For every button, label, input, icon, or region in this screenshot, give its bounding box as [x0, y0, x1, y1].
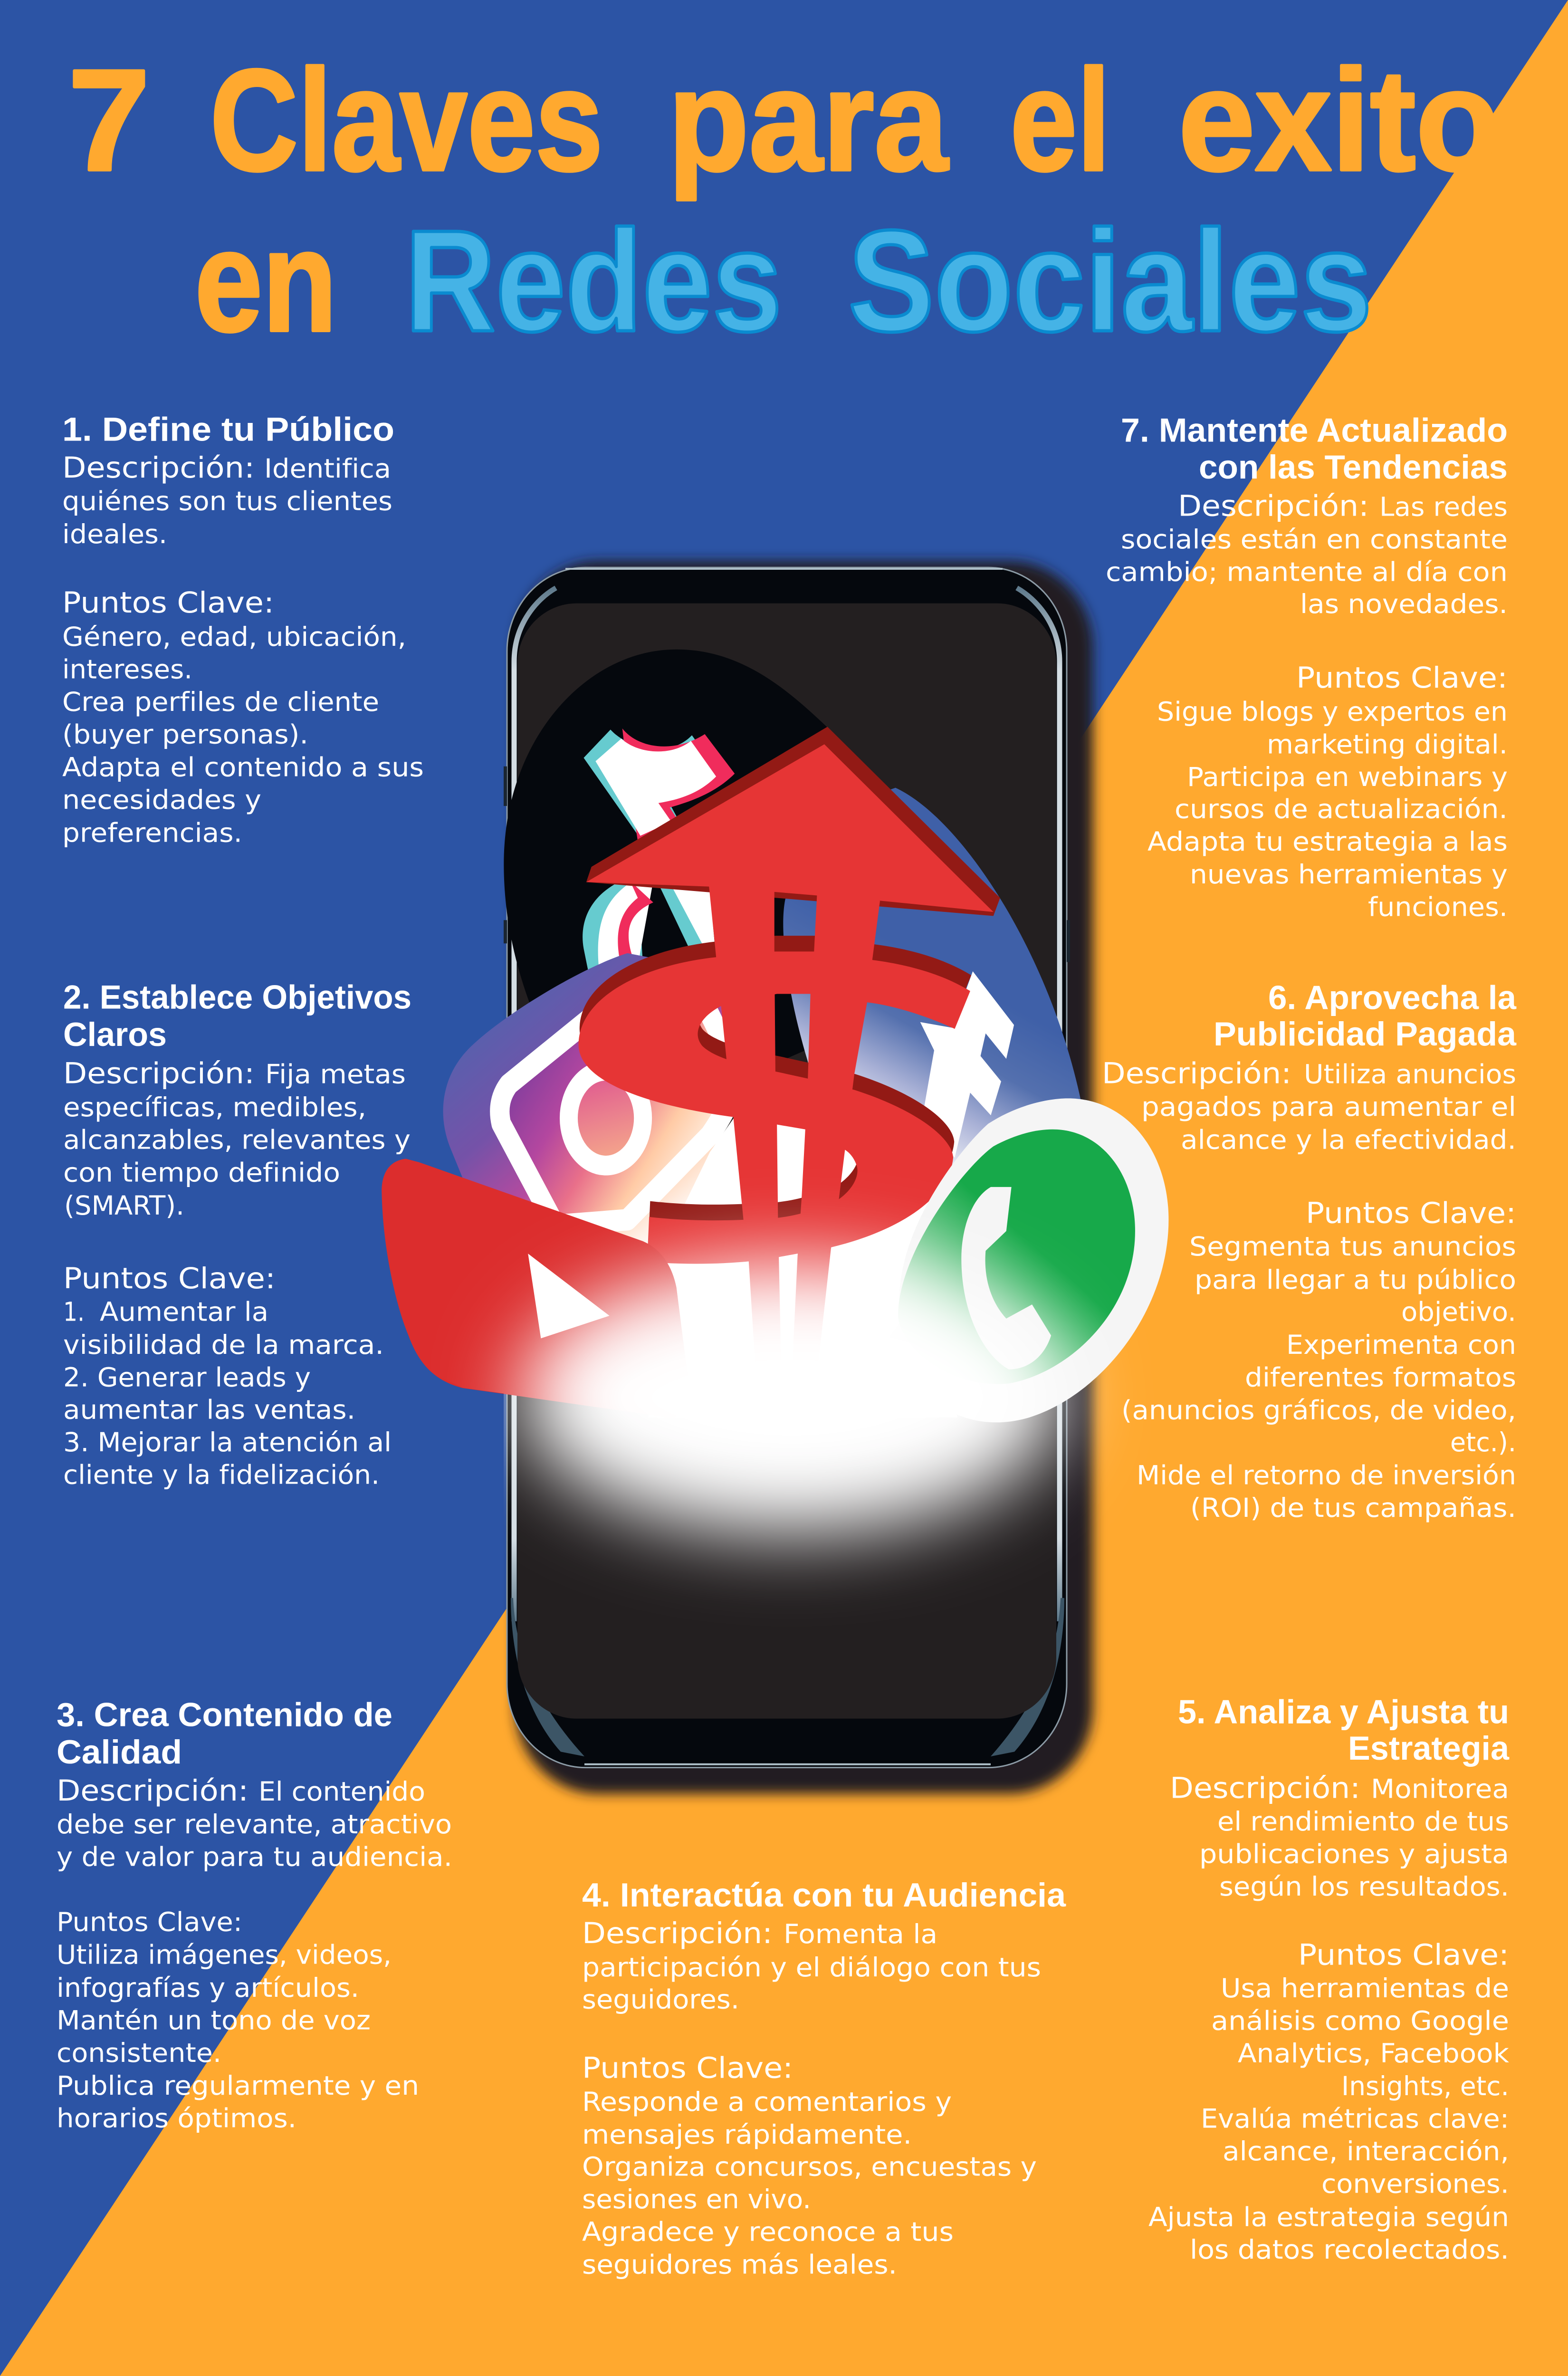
- key points 5: [1148, 1938, 1509, 2265]
- icon: tiktok blob: [504, 650, 896, 1124]
- icon: whatsapp: [867, 1098, 1168, 1422]
- key points 6: objetivo.: [1401, 1297, 1516, 1327]
- key points 2: Puntos Clave:: [63, 1262, 276, 1295]
- key points 4: Organiza concursos, encuestas y: [582, 2152, 1037, 2182]
- key points 3: Publica regularmente y en: [57, 2071, 419, 2101]
- key points 3: [57, 1907, 419, 2134]
- heading 5: [1178, 1693, 1510, 1767]
- description 3: El contenido: [258, 1777, 425, 1807]
- phone: [504, 567, 1070, 1768]
- description 6: [1102, 1057, 1516, 1156]
- key points 6: Puntos Clave:: [1306, 1197, 1516, 1230]
- key points 7: Participa en webinars y: [1187, 762, 1508, 793]
- key points 7: Adapta tu estrategia a las: [1147, 827, 1508, 857]
- key points 7: Sigue blogs y expertos en: [1157, 697, 1508, 728]
- social media icons with dollar arrow: [382, 650, 1168, 1422]
- description 1: quiénes son tus clientes: [62, 487, 392, 517]
- key points 5: alcance, interacción,: [1223, 2137, 1509, 2167]
- description 1: Identifica: [264, 454, 391, 484]
- panel: 7 Mantente Actualizado con las Tendencias: [1106, 412, 1508, 922]
- key points 3: infografías y artículos.: [57, 1973, 359, 2003]
- key points 6: para llegar a tu público: [1195, 1265, 1516, 1295]
- description 2: (SMART).: [64, 1191, 184, 1221]
- description 7: [1106, 489, 1508, 620]
- panel: 1 Define tu Público: [62, 411, 424, 848]
- description 3: y de valor para tu audiencia.: [57, 1842, 452, 1872]
- heading 3: Calidad: [57, 1733, 182, 1771]
- heading 2: [63, 978, 411, 1054]
- description 4: [582, 1917, 1041, 2015]
- key points 5: Analytics, Facebook: [1238, 2039, 1509, 2069]
- key points 6: Segmenta tus anuncios: [1189, 1232, 1516, 1262]
- title: en: [195, 201, 337, 362]
- panel: 2 Establece Objetivos Claros: [63, 978, 411, 1490]
- description 2: alcanzables, relevantes y: [63, 1125, 411, 1156]
- title: Redes: [405, 201, 782, 362]
- key points 7: funciones.: [1368, 892, 1508, 922]
- description 4: seguidores.: [582, 1985, 739, 2015]
- key points 7: [1147, 661, 1508, 922]
- key points 1: Género, edad, ubicación,: [62, 622, 406, 652]
- description 3: [57, 1774, 452, 1872]
- key points 3: consistente.: [57, 2039, 221, 2069]
- description 2: Fija metas: [265, 1060, 406, 1090]
- key points 5: análisis como Google: [1211, 2006, 1509, 2036]
- key points 5: Evalúa métricas clave:: [1201, 2104, 1509, 2134]
- key points 4: mensajes rápidamente.: [582, 2120, 912, 2150]
- key points 3: Utiliza imágenes, videos,: [57, 1940, 392, 1970]
- title: 7: [68, 40, 150, 201]
- description 7: sociales están en constante: [1121, 525, 1508, 555]
- description 5: publicaciones y ajusta: [1199, 1839, 1509, 1869]
- key points 4: seguidores más leales.: [582, 2250, 897, 2280]
- heading 7: 7. Mantente Actualizado: [1121, 412, 1508, 449]
- key points 1: [62, 586, 424, 848]
- description 7: cambio; mantente al día con: [1106, 557, 1508, 587]
- key points 5: Puntos Clave:: [1298, 1938, 1509, 1972]
- key points 1: (buyer personas).: [62, 720, 308, 750]
- key points 3: Mantén un tono de voz: [57, 2006, 371, 2036]
- key points 2: 1.: [63, 1297, 85, 1327]
- key points 1: Puntos Clave:: [62, 586, 274, 620]
- description 4: participación y el diálogo con tus: [582, 1953, 1041, 1983]
- key points 6: Experimenta con: [1286, 1331, 1516, 1360]
- description 5: el rendimiento de tus: [1217, 1807, 1509, 1837]
- key points 4: Agradece y reconoce a tus: [582, 2217, 954, 2248]
- icon: youtube: [382, 1159, 689, 1418]
- heading 5: Estrategia: [1348, 1730, 1510, 1767]
- key points 1: Adapta el contenido a sus: [62, 753, 424, 783]
- heading 3: 3. Crea Contenido de: [57, 1696, 392, 1734]
- description 5: [1170, 1772, 1509, 1902]
- description 7: Las redes: [1379, 492, 1508, 522]
- description 2: Descripción:: [63, 1057, 255, 1090]
- key points 4: Puntos Clave:: [582, 2051, 793, 2085]
- icon: dollar arrow: [579, 727, 1000, 1367]
- key points 6: etc.).: [1450, 1428, 1516, 1458]
- key points 5: conversiones.: [1321, 2169, 1509, 2200]
- heading 2: 2. Establece Objetivos: [63, 978, 411, 1016]
- description 6: Utiliza anuncios: [1304, 1060, 1516, 1090]
- heading 2: Claros: [63, 1016, 167, 1054]
- key points 2: aumentar las ventas.: [63, 1395, 355, 1425]
- icon: facebook f: [920, 971, 1014, 1158]
- description 6: alcance y la efectividad.: [1181, 1125, 1516, 1156]
- key points 2: visibilidad de la marca.: [63, 1331, 384, 1360]
- title: [68, 40, 1500, 362]
- heading 3: [57, 1696, 392, 1771]
- key points 6: (anuncios gráficos, de video,: [1121, 1396, 1516, 1426]
- key points 2: cliente y la fidelización.: [63, 1460, 380, 1490]
- heading 5: 5. Analiza y Ajusta tu: [1178, 1693, 1509, 1731]
- key points 7: cursos de actualización.: [1175, 795, 1508, 824]
- description 1: ideales.: [62, 520, 167, 550]
- description 2: [63, 1057, 411, 1221]
- white patch behind dollar: [648, 1115, 957, 1418]
- description 6: Descripción:: [1102, 1057, 1291, 1090]
- heading 6: 6. Aprovecha la: [1268, 979, 1517, 1016]
- title: exito: [1178, 40, 1500, 201]
- description 4: Descripción:: [582, 1917, 773, 1950]
- icon: facebook blob: [783, 788, 1081, 1293]
- description 2: con tiempo definido: [63, 1158, 340, 1188]
- panel: 4 Interactúa con tu Audiencia: [582, 1876, 1066, 2280]
- key points 1: intereses.: [62, 655, 192, 685]
- key points 7: Puntos Clave:: [1296, 661, 1508, 695]
- title: Sociales: [848, 201, 1372, 362]
- key points 5: Insights, etc.: [1341, 2071, 1509, 2102]
- description 2: específicas, medibles,: [63, 1093, 366, 1123]
- key points 2: 3. Mejorar la atención al: [63, 1428, 392, 1458]
- key points 7: nuevas herramientas y: [1190, 860, 1508, 890]
- description 3: debe ser relevante, atractivo: [57, 1810, 452, 1840]
- heading 6: Publicidad Pagada: [1214, 1016, 1517, 1053]
- key points 5: Usa herramientas de: [1221, 1974, 1509, 2004]
- key points 6: diferentes formatos: [1245, 1363, 1516, 1393]
- key points 5: Ajusta la estrategia según: [1148, 2203, 1509, 2232]
- panel: 6 Aprovecha la Publicidad Pagada: [1102, 979, 1517, 1523]
- description 5: Monitorea: [1371, 1774, 1509, 1804]
- heading 7: con las Tendencias: [1199, 448, 1508, 486]
- key points 6: Mide el retorno de inversión: [1137, 1461, 1516, 1491]
- key points 3: horarios óptimos.: [57, 2104, 296, 2134]
- key points 3: Puntos Clave:: [57, 1907, 242, 1938]
- white glow over icons: [520, 1263, 1062, 1533]
- description 1: Descripción:: [62, 451, 255, 485]
- key points 2: [63, 1262, 392, 1490]
- phone shadow: [516, 561, 1093, 1794]
- icon: tiktok note: [583, 728, 735, 974]
- description 7: Descripción:: [1178, 489, 1369, 523]
- key points 6: [1121, 1197, 1516, 1523]
- description 5: Descripción:: [1170, 1772, 1360, 1805]
- title: para: [668, 40, 949, 201]
- title: Claves: [210, 40, 603, 201]
- panel: 3 Crea Contenido de Calidad: [57, 1696, 452, 2134]
- key points 7: marketing digital.: [1267, 730, 1508, 760]
- description 5: según los resultados.: [1219, 1872, 1509, 1902]
- description 3: Descripción:: [57, 1774, 249, 1808]
- description 6: pagados para aumentar el: [1141, 1092, 1516, 1122]
- icon: instagram: [443, 953, 751, 1254]
- description 4: Fomenta la: [784, 1920, 937, 1950]
- key points 1: necesidades y: [62, 785, 261, 815]
- phone screen: [517, 604, 1056, 1719]
- key points 1: Crea perfiles de cliente: [62, 688, 379, 718]
- key points 2: 2. Generar leads y: [63, 1363, 311, 1393]
- key points 6: (ROI) de tus campañas.: [1190, 1494, 1516, 1523]
- description 1: [62, 451, 392, 550]
- key points 1: preferencias.: [62, 818, 242, 848]
- key points 4: sesiones en vivo.: [582, 2185, 811, 2215]
- title: el: [1010, 40, 1110, 201]
- panel: 5 Analiza y Ajusta tu Estrategia: [1148, 1693, 1510, 2265]
- key points 4: Responde a comentarios y: [582, 2088, 952, 2117]
- heading 7: [1121, 412, 1508, 486]
- description 7: las novedades.: [1300, 590, 1508, 620]
- heading 6: [1214, 979, 1517, 1053]
- key points 2: Aumentar la: [100, 1297, 268, 1327]
- heading 1: 1. Define tu Público: [62, 411, 394, 448]
- key points 4: [582, 2051, 1037, 2280]
- key points 5: los datos recolectados.: [1190, 2235, 1509, 2265]
- heading 4: 4. Interactúa con tu Audiencia: [582, 1876, 1066, 1914]
